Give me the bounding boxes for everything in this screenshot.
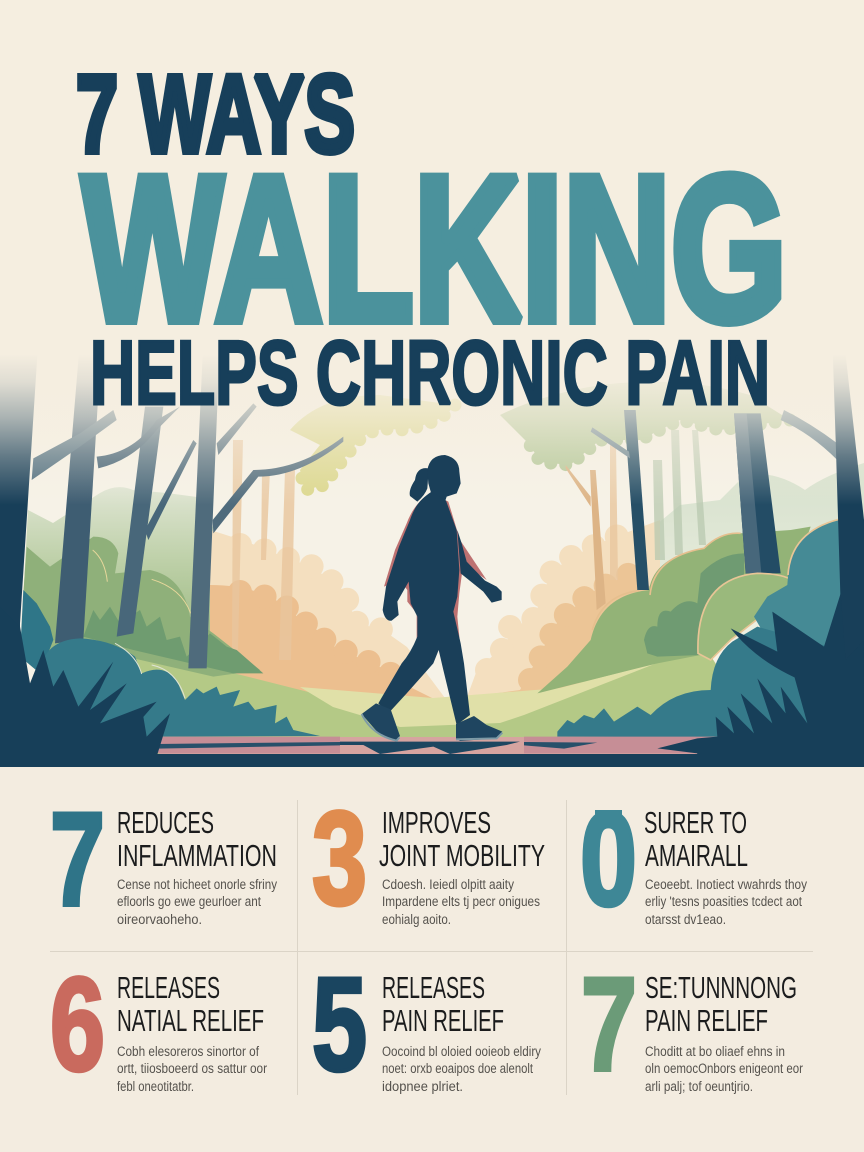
heading: RELEASES (117, 970, 220, 1005)
teal bush left (33, 638, 320, 753)
dark green shrub (644, 553, 744, 657)
description: arli palj; tof oeuntjrio. (645, 1079, 753, 1094)
heading: INFLAMMATION (117, 838, 277, 873)
description: ortt, tiiosboeerd os sattur oor (117, 1061, 267, 1076)
description: eohialg aoito. (382, 912, 451, 927)
benefit 2: improves joint mobility (312, 785, 545, 933)
benefit 6: setunnnong pain relief (581, 951, 803, 1099)
heading: IMPROVES (382, 805, 491, 840)
edge trunk left (0, 340, 38, 770)
green lobe (698, 573, 791, 660)
sage foliage centre right (500, 382, 790, 465)
head (427, 455, 461, 502)
distant peach tree trunks (232, 440, 618, 660)
back shoe (362, 703, 400, 741)
branch on thin trunk (591, 427, 630, 458)
description: noet: orxb eoaipos doe alenolt (382, 1061, 533, 1076)
heading: PAIN RELIEF (382, 1003, 504, 1038)
illustration: forest walking scene (0, 330, 864, 770)
description: oireorvaoheho. (117, 912, 202, 927)
heading: RELEASES (382, 970, 485, 1005)
number 7 green: 7 (581, 951, 637, 1099)
ponytail (410, 468, 428, 502)
right trees and foliage (524, 340, 864, 770)
front shoe (456, 716, 502, 741)
tree trunk 4 (188, 340, 343, 668)
number 7: 7 (50, 786, 105, 934)
far green hills left (20, 487, 213, 660)
tree trunk 2 (55, 340, 180, 643)
far green hills right (650, 463, 864, 640)
edge trunk right (832, 340, 864, 770)
top fade of scene (0, 330, 864, 505)
branch to edge (781, 410, 837, 460)
arc highlights (93, 550, 191, 613)
number 6: 6 (50, 951, 105, 1099)
heading: AMAIRALL (645, 838, 748, 873)
number 0: 0 (580, 786, 637, 934)
description: oln oemocOnbors enigeont eor (645, 1061, 803, 1076)
description: Cense not hicheet onorle sfriny (117, 877, 277, 892)
heading: SURER TO (644, 805, 747, 840)
dark foreground leaves left (0, 607, 170, 770)
grid dividers (50, 800, 813, 1095)
description: febl oneotitatbr. (117, 1079, 194, 1094)
left peach hills (210, 530, 445, 698)
tree trunk 1 branch (32, 410, 117, 480)
benefit 5: releases pain relief (312, 951, 541, 1099)
peach rim strokes (592, 533, 741, 630)
heading: NATIAL RELIEF (117, 1003, 264, 1038)
dark stripes on path (157, 742, 340, 749)
benefits section background (0, 767, 864, 1152)
tree trunk right thick (734, 413, 781, 573)
yellow foliage centre left (290, 395, 455, 490)
tree trunk 3 (117, 407, 197, 637)
description: otarsst dv1eao. (645, 912, 726, 927)
pink road centre (160, 737, 757, 754)
pink path left (113, 737, 340, 753)
tan tree (566, 465, 606, 610)
teal leaves by edge (20, 590, 53, 673)
light path through grass (300, 663, 657, 727)
left trees and foliage (0, 340, 343, 770)
dark stripe on path right (524, 742, 597, 749)
peach rim teal lobe (788, 519, 839, 575)
rose rim light (384, 493, 487, 643)
heading: JOINT MOBILITY (379, 838, 545, 873)
title (76, 53, 787, 424)
benefit 1: reduces inflammation (50, 786, 277, 934)
description: Choditt at bo oliaef ehns in (645, 1044, 785, 1059)
tree trunk right thin (624, 410, 649, 590)
dark foreground leaves right (657, 593, 864, 770)
lower teal bush (557, 627, 864, 738)
description: Cobh elesoreros sinortor of (117, 1044, 259, 1059)
number neck (595, 810, 622, 828)
road shadow and stripes (340, 742, 520, 754)
description: Cdoesh. Ieiedl olpitt aaity (382, 877, 514, 892)
back shoe sole (362, 714, 399, 741)
mid green bush left (23, 537, 260, 677)
heading: PAIN RELIEF (645, 1003, 768, 1038)
title line: 7 ways: 7 WAYS (76, 53, 355, 176)
teal lobe (754, 519, 864, 690)
green bush with peach rim (537, 527, 811, 693)
number 3: 3 (312, 785, 367, 933)
description: idopnee plriet. (382, 1079, 463, 1094)
description: Oocoind bl oloied ooieob eldiry (382, 1044, 541, 1059)
pink path right (524, 737, 757, 753)
walking figure silhouette (340, 455, 520, 754)
description: erliy 'tesns poasities tcdect aot (645, 894, 802, 909)
number 5: 5 (312, 951, 367, 1099)
bottom road shadow band (0, 754, 864, 767)
benefit 3: surer to amairall (580, 786, 807, 934)
body and legs (378, 492, 470, 725)
benefit 4: releases natial relief (50, 951, 267, 1099)
right peach hills (467, 520, 660, 700)
front shoe sole (456, 733, 502, 739)
description: Ceoeebt. Inotiect vwahrds thoy (645, 877, 807, 892)
distant sage tree trunks (653, 430, 706, 560)
rim highlights on teal bush (115, 643, 185, 698)
description: efloorls go ewe geurloer ant (117, 894, 261, 909)
ground (100, 640, 780, 760)
description: Impardene elts tj pecr onigues (382, 894, 540, 909)
lighter side of thick trunk (734, 413, 761, 573)
heading: REDUCES (117, 805, 214, 840)
spiky grass left (83, 607, 263, 673)
front arm (457, 530, 502, 603)
